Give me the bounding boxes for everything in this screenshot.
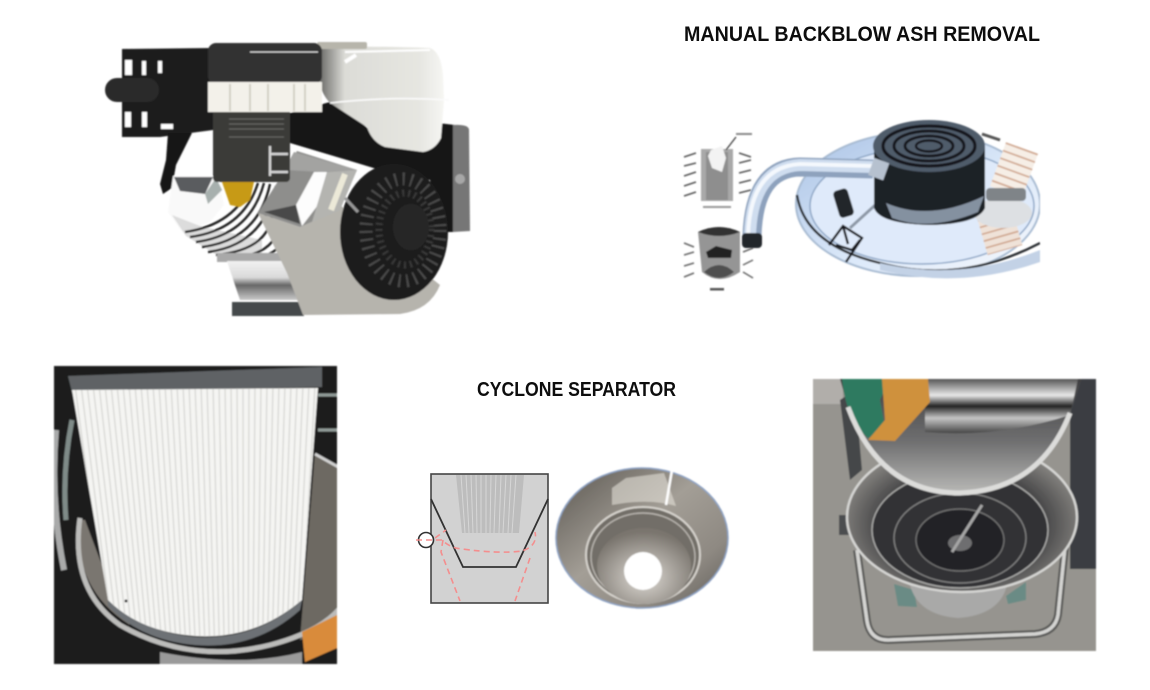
engine illustration	[105, 42, 470, 316]
air filter	[208, 43, 322, 182]
lid disc	[796, 132, 1040, 276]
funnel outline	[431, 499, 548, 567]
grey housing	[258, 205, 440, 315]
diagram box	[431, 474, 548, 603]
raised upper drum	[840, 379, 1082, 493]
rubber pipe tip	[742, 233, 762, 248]
red airflow dashes	[416, 530, 535, 601]
filter pleats	[70, 386, 320, 638]
strut	[160, 133, 192, 194]
yellow fuel fitting	[222, 182, 254, 207]
fuel tank	[317, 42, 449, 152]
motor housing	[868, 120, 985, 225]
side mounting plate	[453, 125, 470, 232]
title: manual backblow ash removal: MANUAL BACKBLOW ASH REMOVAL	[684, 23, 1040, 46]
filter inside diagram	[456, 475, 524, 533]
black rear bracket with slots	[122, 48, 213, 137]
floor	[813, 379, 1096, 651]
engine base	[217, 253, 305, 316]
filter top rim	[68, 367, 322, 392]
elbow pipe	[748, 164, 873, 236]
chrome shroud	[258, 151, 357, 227]
support strut	[848, 204, 876, 230]
wire clip	[829, 226, 862, 262]
lower bucket bowl	[847, 442, 1077, 592]
filter bottom rim	[108, 598, 302, 646]
hose	[974, 134, 1032, 250]
photo: pleated filter cartridge	[54, 366, 340, 664]
title: cyclone separator: CYCLONE SEPARATOR	[477, 379, 676, 401]
handle knob	[105, 78, 159, 102]
stainless cyclone bowl photo	[556, 468, 728, 608]
dark frame behind tank	[290, 100, 455, 232]
casters	[894, 584, 917, 607]
cylinder head	[168, 176, 262, 258]
small black knob	[832, 188, 855, 219]
bowl centre hole	[624, 552, 662, 590]
recoil starter flywheel	[340, 164, 448, 300]
bucket body bottom	[910, 585, 1007, 618]
stand tube	[857, 547, 1065, 640]
photo: open stainless dust bucket	[813, 379, 1096, 651]
backblow diagram: lower filter	[684, 227, 753, 290]
cyclone separator diagram	[416, 474, 548, 603]
vacuum lid with motor	[742, 120, 1040, 278]
cylinder cooling fins	[185, 183, 280, 260]
air inlet circle	[418, 532, 434, 548]
backblow diagram: upper filter	[684, 133, 752, 208]
